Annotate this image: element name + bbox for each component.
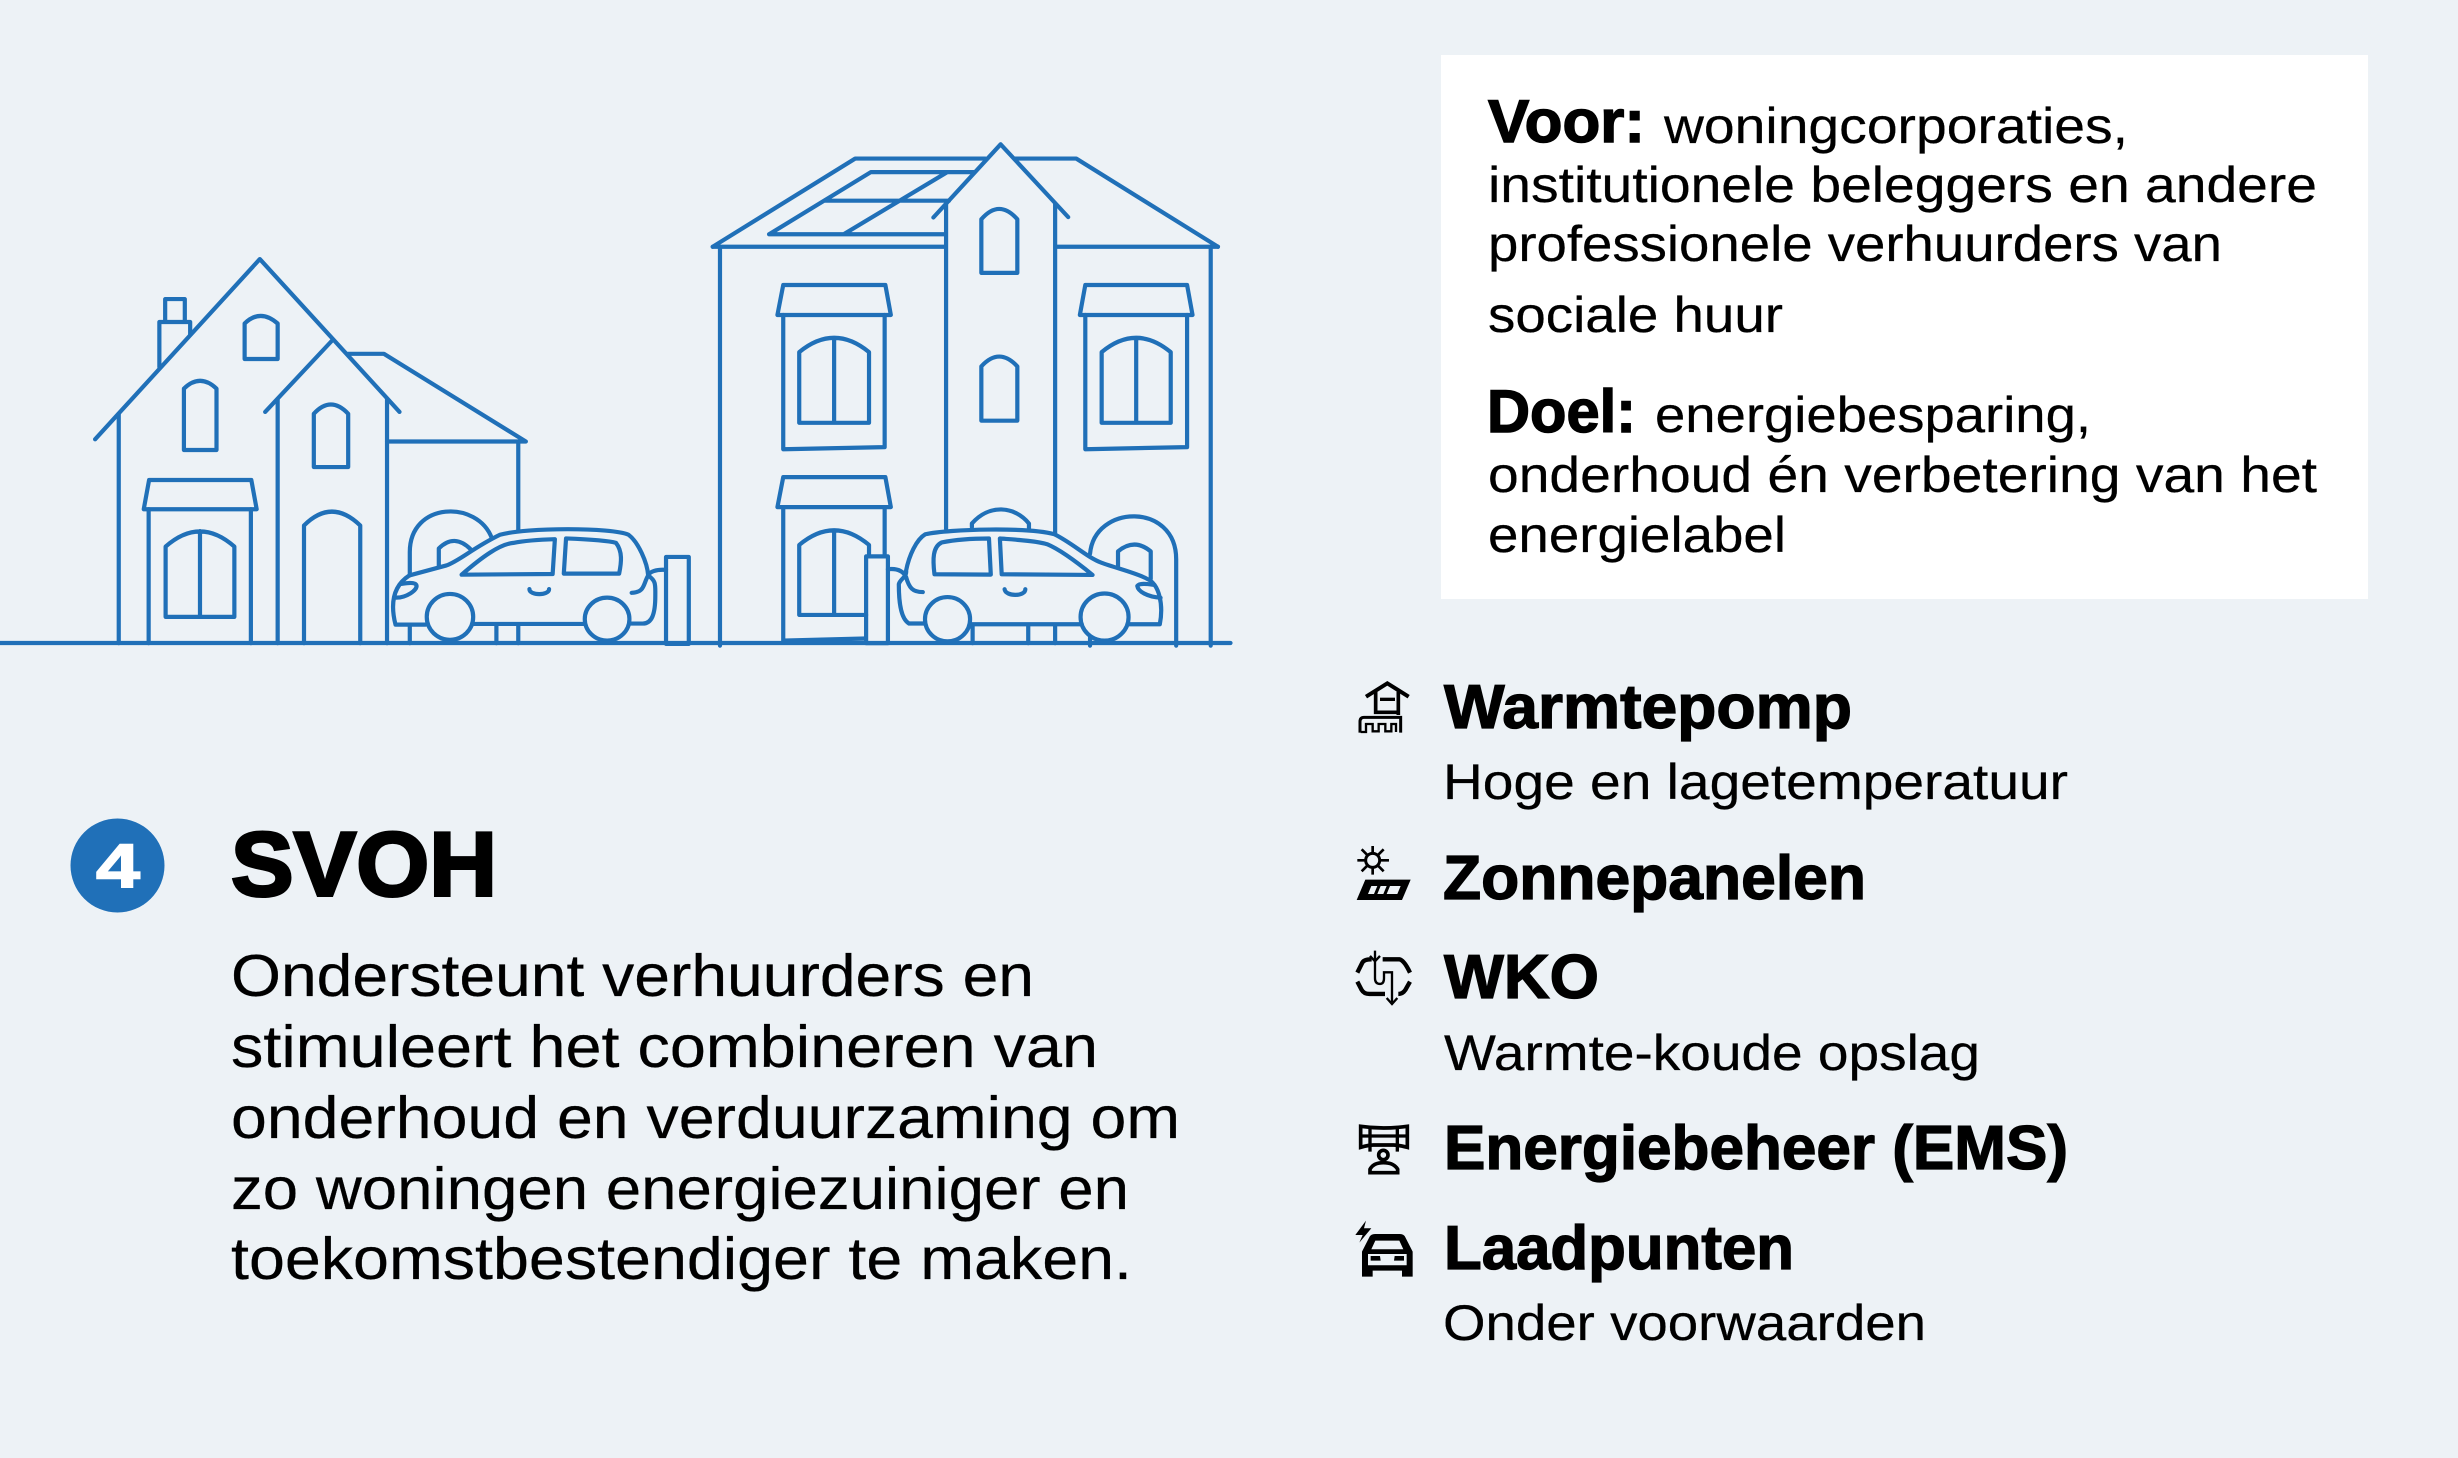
label: Laadpunten — [1444, 1214, 1794, 1283]
heading: SVOH: SVOH — [231, 814, 497, 916]
text block: description: Ondersteunt verhuurders en — [231, 943, 1034, 1009]
sub label: Warmte-koude opslag — [1444, 1025, 1980, 1081]
text: Voor — [1488, 88, 2317, 343]
text: Voor: Voor: — [1488, 88, 1645, 155]
icon: energy management screen — [1361, 1126, 1407, 1173]
list item: Laadpunten — [1355, 1214, 1926, 1351]
panel: audience and goal — [1441, 55, 2368, 599]
left car with charging post — [393, 529, 689, 644]
list item: WKO — [1357, 943, 1980, 1081]
icon: charging car — [1355, 1221, 1413, 1277]
label: WKO — [1444, 943, 1599, 1012]
label: Energiebeheer (EMS) — [1444, 1114, 2068, 1183]
text: Voor: woningcorporaties, — [1663, 98, 2128, 154]
text: Voor: sociale huur — [1488, 287, 1783, 343]
list item: Warmtepomp — [1360, 673, 2068, 810]
number badge: 4 — [96, 832, 141, 901]
left house — [95, 259, 526, 643]
icon: heat pump house — [1360, 683, 1409, 733]
text: Doel: onderhoud én verbetering van het — [1488, 447, 2317, 503]
sub label: Hoge en lagetemperatuur — [1443, 754, 2068, 810]
text: Doel: energielabel — [1488, 507, 1786, 563]
text: Doel: energiebesparing, — [1655, 387, 2091, 443]
illustration: houses with cars — [0, 144, 1230, 646]
text: Doel: Doel: — [1487, 378, 1636, 445]
icon: sun and solar panel — [1357, 846, 1411, 900]
text block: description — [231, 943, 1180, 1292]
right car with charging post — [866, 530, 1161, 643]
text: Doel — [1487, 378, 2317, 563]
list item: Zonnepanelen — [1357, 844, 1866, 913]
right house — [713, 144, 1218, 646]
text block: description: stimuleert het combineren van — [231, 1014, 1098, 1080]
ground line — [0, 641, 1230, 645]
icon: thermal storage cycle — [1357, 951, 1410, 1004]
sub label: Onder voorwaarden — [1443, 1295, 1926, 1351]
text: Voor: professionele verhuurders van — [1488, 216, 2222, 272]
list item: Energiebeheer — [1361, 1114, 2068, 1183]
text block: description: onderhoud en verduurzaming om — [231, 1085, 1180, 1151]
text block: description: zo woningen energiezuiniger en — [231, 1156, 1129, 1222]
text: Voor: institutionele beleggers en andere — [1488, 157, 2317, 213]
text block: description: toekomstbestendiger te maken. — [231, 1226, 1132, 1292]
label: Warmtepomp — [1444, 673, 1852, 742]
number badge — [70, 818, 164, 912]
label: Zonnepanelen — [1443, 844, 1866, 913]
